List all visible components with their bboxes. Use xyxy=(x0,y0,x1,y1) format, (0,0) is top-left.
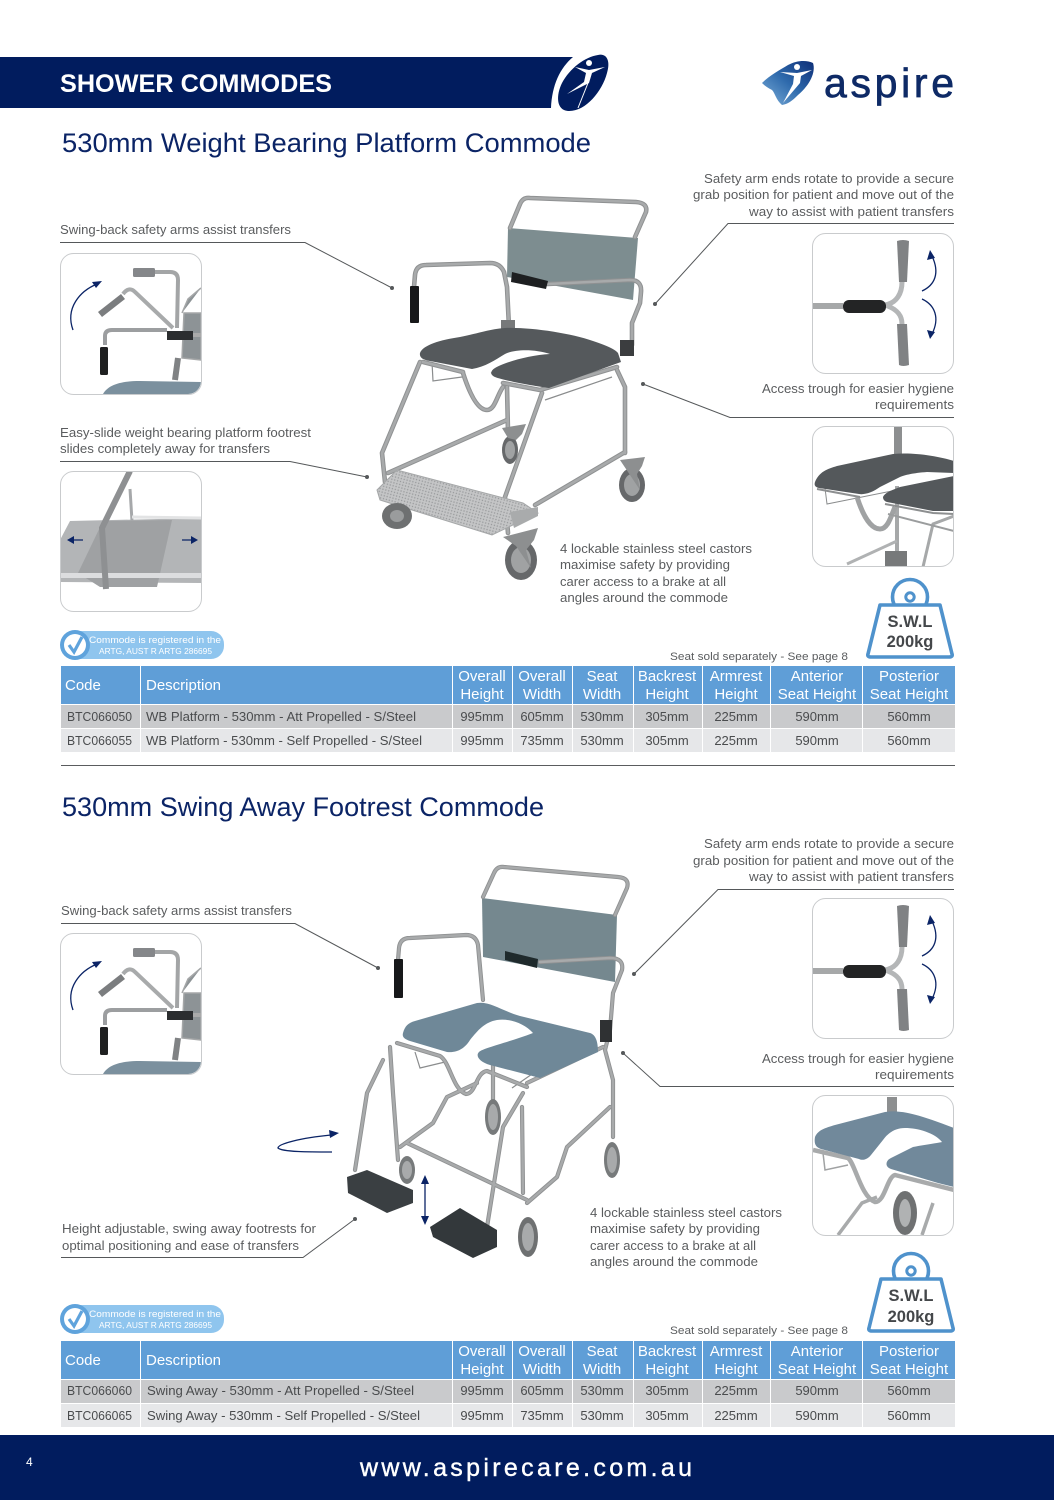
table: platform commode specifications: 560mm xyxy=(887,709,931,724)
table: platform commode specifications: Posterior xyxy=(879,668,939,685)
table: platform commode specifications: Backrest xyxy=(638,668,697,685)
table: swing away commode specifications: 225mm xyxy=(714,1383,758,1398)
badge: ARTG registration: ARTG, AUST R ARTG 286695 xyxy=(99,1320,212,1330)
table: swing away commode specifications: Seat Height xyxy=(778,1361,857,1378)
panel: swing away footrest commode xyxy=(60,836,955,1427)
table: swing away commode specifications: BTC066065 xyxy=(67,1408,132,1423)
table: platform commode specifications: Description xyxy=(146,677,221,694)
table: platform commode specifications: 225mm xyxy=(714,709,758,724)
callout: safety arm ends: grab position for patient and move out of the xyxy=(693,853,954,868)
callout: height adjustable footrests xyxy=(61,1217,357,1258)
table: swing away commode specifications: 530mm xyxy=(580,1383,624,1398)
callout: access trough: Access trough for easier hygiene xyxy=(762,381,954,396)
table: platform commode specifications: Seat Height xyxy=(870,686,949,703)
table: swing away commode specifications: 995mm xyxy=(460,1408,504,1423)
thumbnail: swing-back arm xyxy=(60,254,202,394)
table: swing away commode specifications: Posterior xyxy=(879,1343,939,1360)
callout: access trough: Access trough for easier hygiene xyxy=(762,1051,954,1066)
table: platform commode specifications: Height xyxy=(714,686,759,703)
footer bar xyxy=(0,1435,1054,1500)
thumbnail: rotating arm ends xyxy=(812,898,954,1038)
callout: safety arm ends: Safety arm ends rotate to provide a secure xyxy=(704,171,954,186)
table: swing away commode specifications: Backrest xyxy=(638,1343,697,1360)
icon: safe working load weight: 200kg xyxy=(888,1308,934,1326)
table: swing away commode specifications: BTC066060 xyxy=(67,1383,132,1398)
table: swing away commode specifications: Height xyxy=(714,1361,759,1378)
table: swing away commode specifications xyxy=(61,1341,955,1427)
table: platform commode specifications: 305mm xyxy=(645,733,689,748)
callout: access trough xyxy=(641,381,955,418)
callout: platform footrest: Easy-slide weight bearing platform footrest xyxy=(60,425,311,440)
table: platform commode specifications: Overall xyxy=(458,668,506,685)
casters xyxy=(382,424,645,580)
table: platform commode specifications: Armrest xyxy=(710,668,763,685)
photo: swing away commode xyxy=(347,867,628,1258)
table: platform commode specifications: Seat xyxy=(587,668,618,685)
table: swing away commode specifications: 735mm xyxy=(520,1408,564,1423)
table: platform commode specifications xyxy=(61,666,955,752)
table: swing away commode specifications: 995mm xyxy=(460,1383,504,1398)
callout: safety arm ends: way to assist with patient transfers xyxy=(748,204,955,219)
table: platform commode specifications: WB Platform - 530mm - Att Propelled - S/Steel xyxy=(146,709,416,724)
table: platform commode specifications: 560mm xyxy=(887,733,931,748)
table: swing away commode specifications: Width xyxy=(583,1361,621,1378)
table: swing away commode specifications: 560mm xyxy=(887,1383,931,1398)
table: platform commode specifications: 735mm xyxy=(520,733,564,748)
callout: swing-back arms xyxy=(61,903,380,970)
table: platform commode specifications: Code xyxy=(65,677,101,694)
table: platform commode specifications: 995mm xyxy=(460,733,504,748)
text: lockable castors: angles around the commode xyxy=(560,590,728,605)
footrests xyxy=(347,1170,497,1258)
website: www.aspirecare.com.au xyxy=(359,1454,692,1482)
casters xyxy=(399,1099,620,1257)
table: swing away commode specifications: Height xyxy=(645,1361,690,1378)
table: swing away commode specifications: Overall xyxy=(458,1343,506,1360)
icon: safe working load weight xyxy=(868,580,952,657)
table: platform commode specifications: Seat Height xyxy=(778,686,857,703)
callout: safety arm ends xyxy=(632,836,955,976)
badge: ARTG registration: Commode is registered in the xyxy=(89,635,221,646)
table: platform commode specifications: BTC066055 xyxy=(67,733,132,748)
table: platform commode specifications: 605mm xyxy=(520,709,564,724)
badge: ARTG registration: Commode is registered in the xyxy=(89,1309,221,1320)
table: platform commode specifications: 590mm xyxy=(795,733,839,748)
thumbnail: access trough blue seat xyxy=(812,1096,954,1236)
icon: safe working load weight: 200kg xyxy=(887,633,933,651)
table: platform commode specifications: WB Platform - 530mm - Self Propelled - S/Steel xyxy=(146,733,422,748)
callout: access trough: requirements xyxy=(875,1067,955,1082)
callout: safety arm ends: Safety arm ends rotate to provide a secure xyxy=(704,836,954,851)
callout: platform footrest: slides completely away for transfers xyxy=(60,441,270,456)
table: swing away commode specifications: 530mm xyxy=(580,1408,624,1423)
icon: safe working load weight: S.W.L xyxy=(888,613,932,631)
callout: platform footrest xyxy=(60,425,369,479)
callout: swing-back arms: Swing-back safety arms assist transfers xyxy=(61,903,292,918)
heading: 530mm Swing Away Footrest Commode: 530mm Swing Away Footrest Commode xyxy=(62,792,544,822)
header bar xyxy=(0,55,608,111)
callout: safety arm ends xyxy=(653,171,955,306)
panel: weight bearing platform commode xyxy=(60,171,955,752)
table: platform commode specifications: BTC066050 xyxy=(67,709,132,724)
icon: safe working load weight xyxy=(869,1254,953,1331)
text: lockable castors: carer access to a brake at all xyxy=(560,574,726,589)
table: platform commode specifications: 530mm xyxy=(580,709,624,724)
table: swing away commode specifications: 225mm xyxy=(714,1408,758,1423)
table: swing away commode specifications: Swing Away - 530mm - Att Propelled - S/Steel xyxy=(147,1383,414,1398)
callout: swing-back arms: Swing-back safety arms assist transfers xyxy=(60,222,291,237)
table: swing away commode specifications: 305mm xyxy=(645,1408,689,1423)
table: platform commode specifications: Overall xyxy=(518,668,566,685)
callout: safety arm ends: grab position for patient and move out of the xyxy=(693,187,954,202)
callout: access trough: requirements xyxy=(875,397,955,412)
table: platform commode specifications: Width xyxy=(583,686,621,703)
table: swing away commode specifications: Height xyxy=(460,1361,505,1378)
callout: height adjustable footrests: optimal positioning and ease of transfers xyxy=(62,1238,300,1253)
logo: aspire xyxy=(762,60,954,106)
table: swing away commode specifications: Anterior xyxy=(791,1343,843,1360)
table: swing away commode specifications: Swing Away - 530mm - Self Propelled - S/Steel xyxy=(147,1408,420,1423)
page number: 4 xyxy=(26,1455,33,1469)
text: lockable castors: maximise safety by providing xyxy=(560,557,730,572)
table: platform commode specifications: 305mm xyxy=(645,709,689,724)
text: lockable castors: carer access to a brake at all xyxy=(590,1238,756,1253)
thumbnail: rotating arm ends xyxy=(812,234,954,374)
table: platform commode specifications: 995mm xyxy=(460,709,504,724)
arrow: swing away xyxy=(278,1130,339,1152)
table: swing away commode specifications: 590mm xyxy=(795,1383,839,1398)
logo: aspire: aspire xyxy=(824,60,954,106)
text: lockable castors xyxy=(590,1205,783,1269)
text: lockable castors: maximise safety by providing xyxy=(590,1221,760,1236)
table: swing away commode specifications: Seat Height xyxy=(870,1361,949,1378)
table: swing away commode specifications: Code xyxy=(65,1352,101,1369)
section title: SHOWER COMMODES xyxy=(60,70,332,98)
text: lockable castors xyxy=(560,541,753,605)
table: swing away commode specifications: Seat xyxy=(587,1343,618,1360)
table: platform commode specifications: Anterior xyxy=(791,668,843,685)
text: lockable castors: 4 lockable stainless steel castors xyxy=(560,541,753,556)
text: lockable castors: 4 lockable stainless steel castors xyxy=(590,1205,783,1220)
table: platform commode specifications: 530mm xyxy=(580,733,624,748)
icon: figure oval emblem xyxy=(558,55,608,111)
photo: platform commode xyxy=(377,198,646,580)
table: platform commode specifications: 590mm xyxy=(795,709,839,724)
callout: safety arm ends: way to assist with patient transfers xyxy=(748,869,955,884)
callout: height adjustable footrests: Height adjustable, swing away footrests for xyxy=(62,1221,317,1236)
badge: ARTG registration: ARTG, AUST R ARTG 286695 xyxy=(99,646,212,656)
table: platform commode specifications: Width xyxy=(523,686,561,703)
thumbnail: swing-back arm xyxy=(60,934,202,1074)
table: swing away commode specifications: Overall xyxy=(518,1343,566,1360)
badge: ARTG registration xyxy=(60,630,224,660)
table: platform commode specifications: 225mm xyxy=(714,733,758,748)
table: swing away commode specifications: Armrest xyxy=(710,1343,763,1360)
table: swing away commode specifications: 560mm xyxy=(887,1408,931,1423)
note: seat sold separately: Seat sold separately - See page 8 xyxy=(670,1325,848,1337)
table: platform commode specifications: Height xyxy=(460,686,505,703)
table: platform commode specifications: Height xyxy=(645,686,690,703)
heading: 530mm Weight Bearing Platform Commode: 530mm Weight Bearing Platform Commode xyxy=(62,128,591,158)
arrow: height adjustment xyxy=(421,1175,429,1225)
table: swing away commode specifications: 605mm xyxy=(520,1383,564,1398)
note: seat sold separately: Seat sold separately - See page 8 xyxy=(670,651,848,663)
thumbnail: sliding platform xyxy=(60,471,202,612)
badge: ARTG registration xyxy=(60,1304,224,1334)
text: lockable castors: angles around the commode xyxy=(590,1254,758,1269)
table: swing away commode specifications: 590mm xyxy=(795,1408,839,1423)
callout: access trough xyxy=(621,1051,955,1086)
table: swing away commode specifications: Width xyxy=(523,1361,561,1378)
callout: swing-back arms xyxy=(60,222,394,290)
table: swing away commode specifications: 305mm xyxy=(645,1383,689,1398)
thumbnail: access trough xyxy=(812,426,954,567)
table: swing away commode specifications: Description xyxy=(146,1352,221,1369)
icon: safe working load weight: S.W.L xyxy=(889,1287,933,1305)
